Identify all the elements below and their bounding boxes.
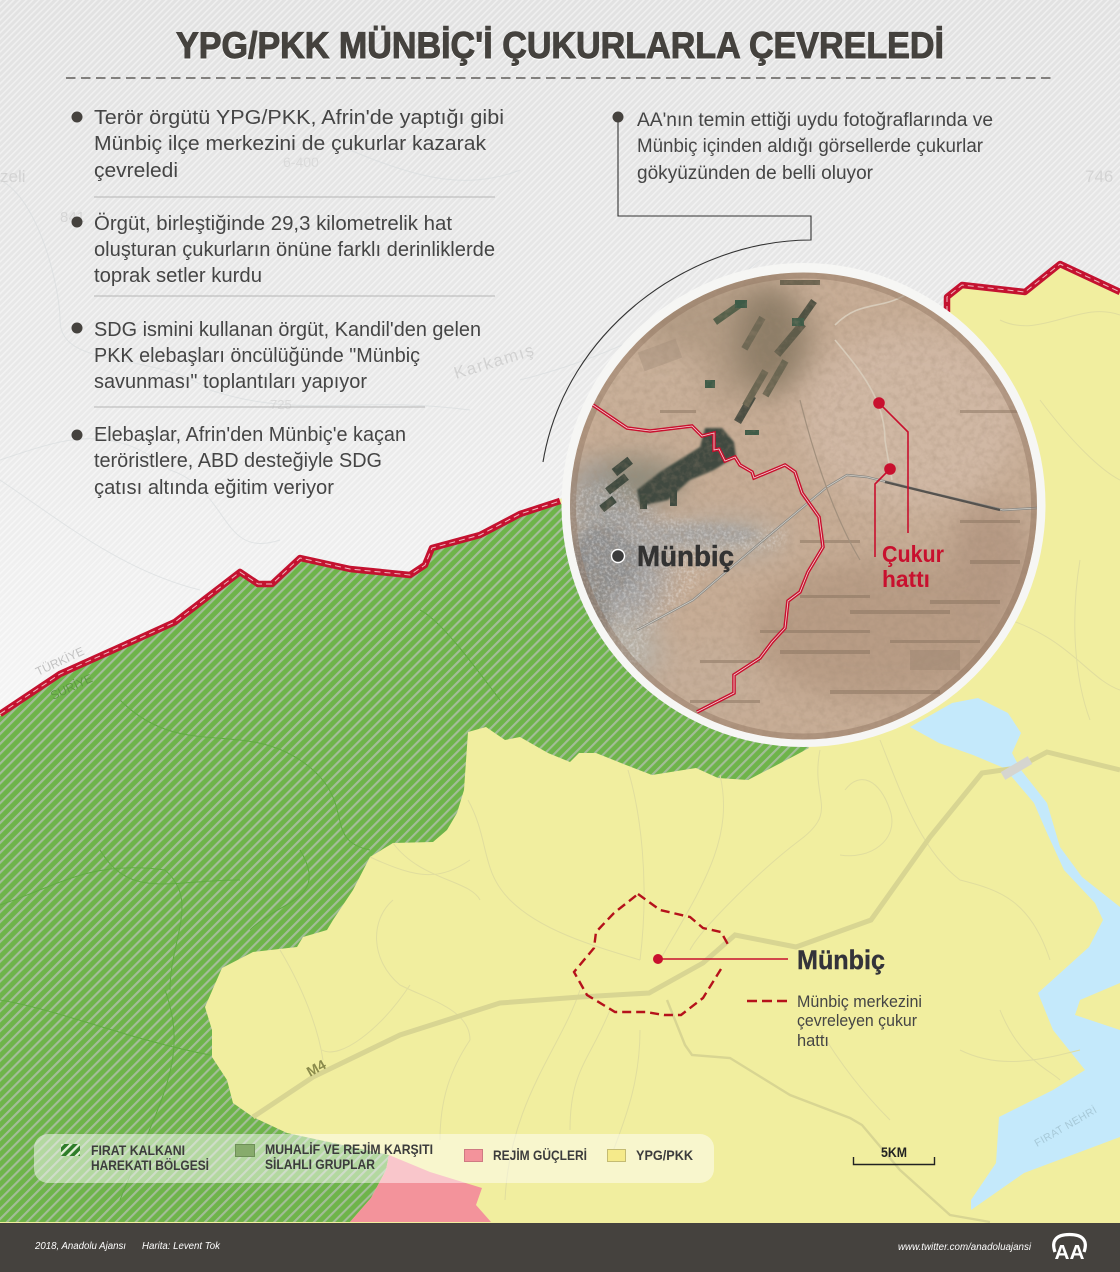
circle frame	[562, 263, 1046, 747]
legend: Rejim: REJİM GÜÇLERİ	[493, 1147, 587, 1163]
bullet 4	[72, 424, 406, 499]
label: Münbiç: Münbiç	[797, 945, 885, 975]
border line: Türkiye-Suriye	[0, 264, 1120, 714]
bullet 1: Münbiç ilçe merkezini de çukurlar kazarak	[94, 133, 487, 155]
legend: trench line note: çevreleyen çukur	[797, 1012, 917, 1030]
road label: M4: M4	[304, 1056, 329, 1080]
background: Turkey territory (grey striped): 746	[1085, 167, 1113, 186]
icon: AA logo: AA	[1054, 1242, 1084, 1264]
background: Turkey territory (grey striped): 725	[270, 397, 292, 412]
satellite map: circular inset	[560, 260, 1050, 750]
legend: trench line note: hattı	[797, 1032, 829, 1050]
text block: satellite note: gökyüzünden de belli oluyor	[637, 163, 874, 184]
background: Turkey territory (grey striped)	[0, 0, 1120, 712]
trench line contour around Münbiç	[574, 894, 730, 1015]
green zone road network	[0, 610, 500, 1200]
bullet 3: savunması" toplantıları yapıyor	[94, 371, 367, 393]
roads in satellite	[637, 295, 1037, 630]
legend panel	[34, 1134, 714, 1183]
bullet 3: PKK elebaşları öncülüğünde "Münbiç	[94, 345, 420, 367]
scale bar: 5KM	[881, 1145, 907, 1160]
legend: trench line note: Münbiç merkezini	[797, 993, 922, 1011]
background: Turkey territory (grey striped): Karkamış	[452, 340, 537, 383]
text block: satellite note: Münbiç içinden aldığı görsellerde çukurlar	[637, 136, 984, 157]
background: Turkey territory (grey striped): zeli	[0, 167, 26, 186]
legend: Fırat Kalkanı	[61, 1142, 209, 1173]
city speckle	[570, 479, 786, 666]
bullet 4: çatısı altında eğitim veriyor	[94, 477, 334, 499]
satellite image	[560, 260, 1050, 750]
bullet 1: çevreledi	[94, 160, 178, 182]
country label: Türkiye: TÜRKİYE	[33, 644, 86, 679]
green zone: Fırat Kalkanı region	[0, 503, 809, 1222]
Münbiç marker and leader	[653, 954, 788, 964]
label: river: FIRAT NEHRİ	[1032, 1103, 1100, 1150]
label: Çukur hattı: hattı	[882, 566, 930, 592]
legend: Muhalif: MUHALİF VE REJİM KARŞITI	[265, 1141, 433, 1157]
background: Turkey territory (grey striped): 6-400	[283, 154, 319, 170]
bullet 4: Elebaşlar, Afrin'den Münbiç'e kaçan	[94, 424, 406, 446]
bullet 2: Örgüt, birleştiğinde 29,3 kilometrelik hat	[94, 213, 452, 235]
credit: agency: 2018, Anadolu Ajansı	[34, 1241, 126, 1252]
legend: Muhalif: SİLAHLI GRUPLAR	[265, 1156, 375, 1172]
background: Turkey territory (grey striped): 841	[60, 209, 85, 226]
bullet 3	[72, 319, 481, 393]
bullet 2: toprak setler kurdu	[94, 265, 262, 287]
bullet 3: SDG ismini kullanan örgüt, Kandil'den gelen	[94, 319, 481, 341]
footer bar	[0, 1223, 1120, 1272]
title divider	[66, 77, 1054, 79]
label: Çukur hattı	[882, 541, 944, 592]
label: Münbiç in satellite: Münbiç	[637, 541, 734, 573]
texture	[576, 281, 1037, 734]
connector: arc from text to circle	[543, 117, 811, 462]
text block: satellite note: AA'nın temin ettiği uydu fotoğraflarında ve	[637, 110, 993, 131]
legend: trench line note	[747, 993, 922, 1050]
legend: YPG/PKK: YPG/PKK	[636, 1147, 693, 1163]
text block: bullets	[72, 107, 504, 499]
rim shading	[573, 276, 1034, 736]
field strips	[638, 339, 1030, 703]
legend: Rejim	[464, 1147, 587, 1163]
title: YPG/PKK MÜNBİÇ'İ ÇUKURLARLA ÇEVRELEDİ	[176, 25, 944, 66]
dark fields	[599, 280, 820, 512]
water: lake and Fırat river	[910, 698, 1120, 1210]
red trench/front line in satellite	[593, 405, 823, 712]
credit: map: Harita: Levent Tok	[142, 1241, 221, 1252]
legend: Fırat Kalkanı: FIRAT KALKANI	[91, 1142, 185, 1158]
marker: trench line callouts	[874, 398, 908, 557]
marker: Münbiç dot	[612, 550, 624, 562]
legend: Muhalif	[236, 1141, 433, 1172]
bullet 1	[72, 107, 504, 182]
bullet 2: oluşturan çukurların önüne farklı derinliklerde	[94, 239, 495, 261]
legend: Fırat Kalkanı: HAREKATI BÖLGESİ	[91, 1157, 209, 1173]
scale bar	[854, 1145, 934, 1164]
bullet 1: Terör örgütü YPG/PKK, Afrin'de yaptığı gibi	[94, 107, 504, 129]
major roads	[253, 752, 1120, 1222]
bullet 4: teröristlere, ABD desteğiyle SDG	[94, 450, 382, 472]
legend: YPG/PKK	[608, 1147, 693, 1163]
country label: Suriye: SURİYE	[48, 671, 95, 703]
pink zone: regime forces	[350, 1155, 491, 1222]
icon: AA logo	[1054, 1234, 1085, 1264]
minor roads on yellow area	[280, 312, 1120, 1200]
text block: satellite note	[612, 110, 993, 184]
twitter url: www.twitter.com/anadoluajansi	[898, 1241, 1032, 1253]
bullet 2	[72, 213, 495, 287]
label: Çukur hattı: Çukur	[882, 541, 944, 567]
